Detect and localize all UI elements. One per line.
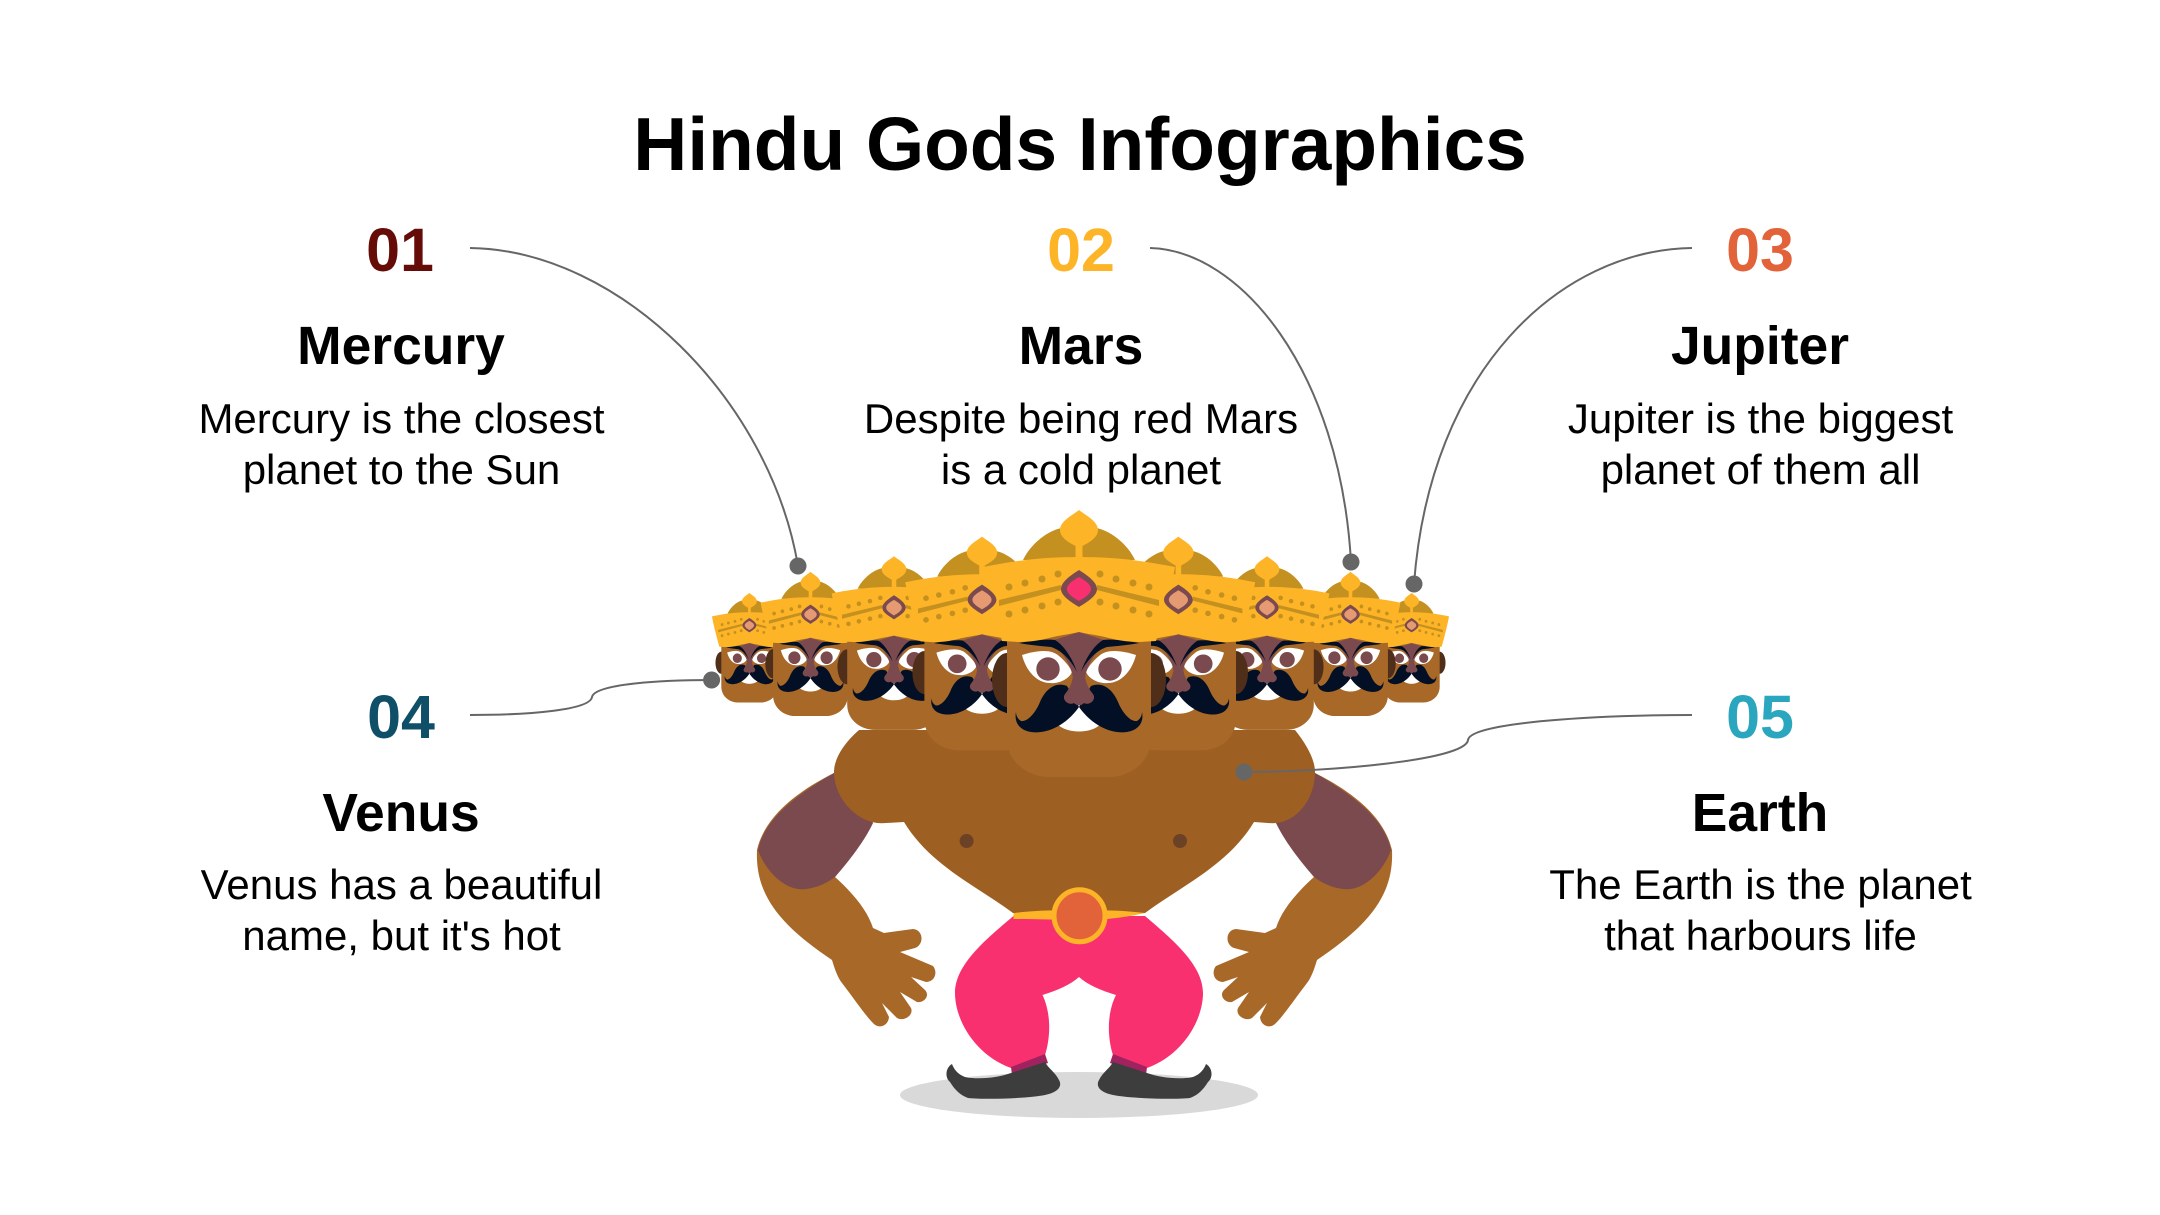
- description Venus: Venus has a beautiful: [201, 861, 602, 908]
- description Jupiter: Jupiter is the biggest: [1568, 395, 1953, 442]
- number 02: 02: [1047, 216, 1115, 284]
- item 04: Venus: [201, 683, 602, 959]
- heading Jupiter: Jupiter: [1671, 317, 1849, 376]
- description Venus: name, but it's hot: [242, 912, 561, 959]
- trouser cuffs: [1011, 1054, 1147, 1075]
- heading Mars: Mars: [1019, 317, 1143, 376]
- number 01: 01: [366, 216, 434, 284]
- connector 05: [1236, 715, 1692, 780]
- number 03: 03: [1726, 216, 1794, 284]
- crown gems: [742, 570, 1419, 632]
- right shoe: [1098, 1062, 1212, 1099]
- description Earth: that harbours life: [1604, 912, 1917, 959]
- description Mars: Despite being red Mars: [864, 395, 1298, 442]
- connector 04: [470, 672, 720, 715]
- torso: [834, 730, 1315, 913]
- connector 03: [1406, 248, 1692, 592]
- description Mercury: Mercury is the closest: [198, 395, 605, 442]
- pink trousers: [955, 916, 1203, 1068]
- heading Venus: Venus: [322, 784, 480, 843]
- heading Earth: Earth: [1692, 784, 1828, 843]
- item 02: Mars: [864, 216, 1298, 493]
- description Mercury: planet to the Sun: [243, 446, 560, 493]
- heading Mercury: Mercury: [297, 317, 505, 376]
- description Earth: The Earth is the planet: [1549, 861, 1972, 908]
- item 05: Earth: [1549, 683, 1972, 959]
- description Jupiter: planet of them all: [1601, 446, 1920, 493]
- description Mars: is a cold planet: [941, 446, 1221, 493]
- shadow under figure: [900, 1072, 1258, 1118]
- connector 01: [470, 248, 806, 574]
- number 05: 05: [1726, 683, 1794, 751]
- item 01: Mercury: [198, 216, 605, 493]
- outer heads left and right: [712, 537, 1449, 750]
- right arm: [1214, 773, 1392, 1026]
- left arm: [757, 773, 935, 1026]
- connector 02: [1150, 248, 1360, 570]
- belt buckle: [1054, 890, 1105, 942]
- item 03: Jupiter: [1568, 216, 1953, 493]
- connector lines and markers: [470, 248, 1692, 780]
- chest marks: [960, 834, 1187, 848]
- title: Hindu Gods Infographics: [633, 102, 1527, 186]
- illustration: many-headed figure: [712, 510, 1449, 1099]
- left shoe: [946, 1062, 1060, 1099]
- number 04: 04: [367, 683, 435, 751]
- belt: [1014, 910, 1145, 920]
- central head: [983, 510, 1175, 777]
